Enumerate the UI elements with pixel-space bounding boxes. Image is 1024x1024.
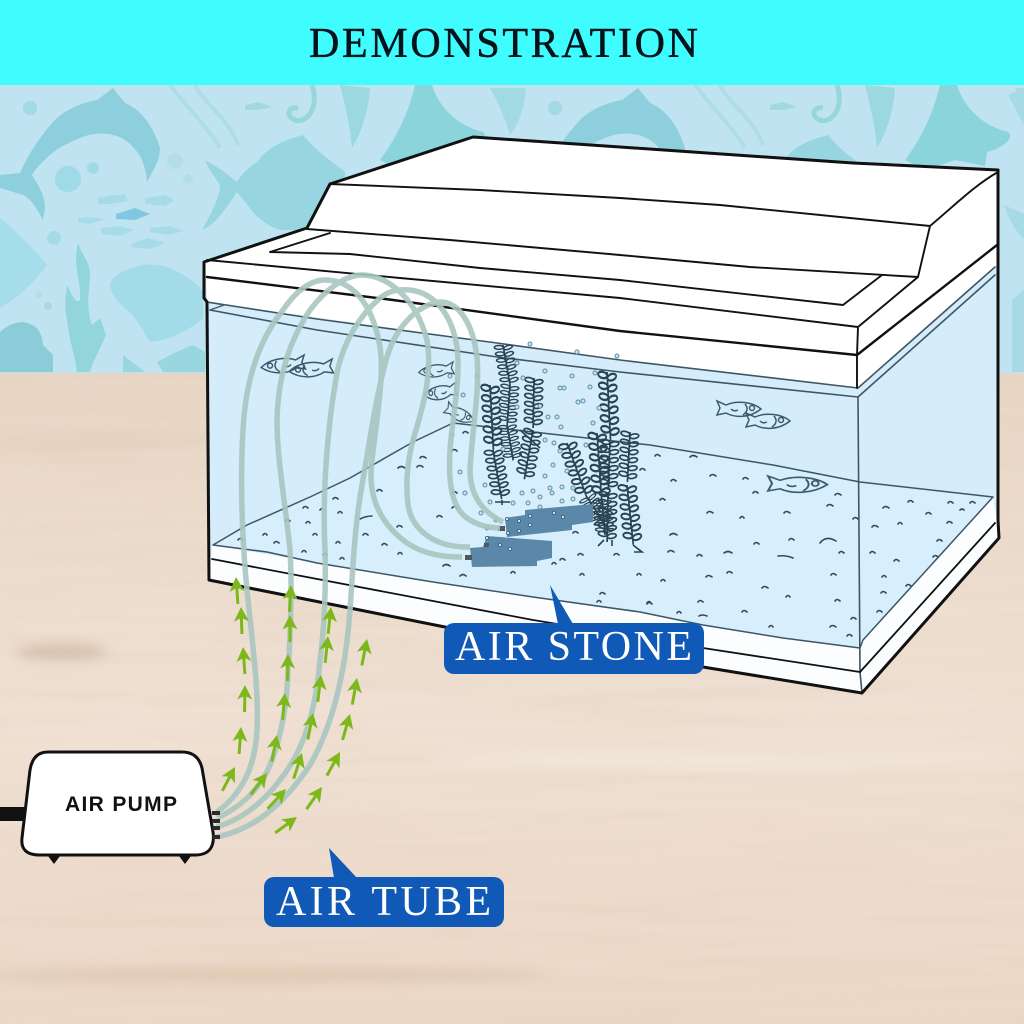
front corner post bbox=[858, 397, 862, 693]
air pump bbox=[0, 752, 220, 864]
air tubes bbox=[217, 275, 503, 837]
fish bbox=[260, 355, 827, 492]
label: air tube: AIR TUBE bbox=[276, 879, 491, 925]
label: air stone bbox=[444, 585, 704, 674]
bubbles bbox=[448, 342, 619, 530]
green arrows bbox=[216, 576, 374, 839]
title: DEMONSTRATION bbox=[309, 21, 698, 67]
lid second rim line bbox=[207, 245, 997, 355]
air pump label: AIR PUMP bbox=[65, 793, 177, 816]
air stones bbox=[465, 504, 593, 567]
lid thin lines bbox=[207, 172, 998, 388]
plants bbox=[481, 342, 643, 552]
bottom glass white strip bbox=[209, 497, 999, 693]
gravel bed bbox=[213, 423, 993, 648]
water surface lines bbox=[207, 267, 995, 397]
label: air tube bbox=[264, 848, 504, 927]
tank thick outline bbox=[204, 137, 999, 693]
lid body bbox=[205, 137, 998, 388]
base inner line bbox=[212, 523, 995, 672]
water body bbox=[207, 265, 997, 672]
gravel specks bbox=[238, 432, 975, 636]
wooden table bbox=[0, 373, 1024, 1024]
header bar bbox=[0, 0, 1024, 85]
wallpaper background bbox=[0, 85, 1024, 373]
label: air stone: AIR STONE bbox=[455, 624, 692, 670]
aquarium tank bbox=[204, 137, 999, 693]
